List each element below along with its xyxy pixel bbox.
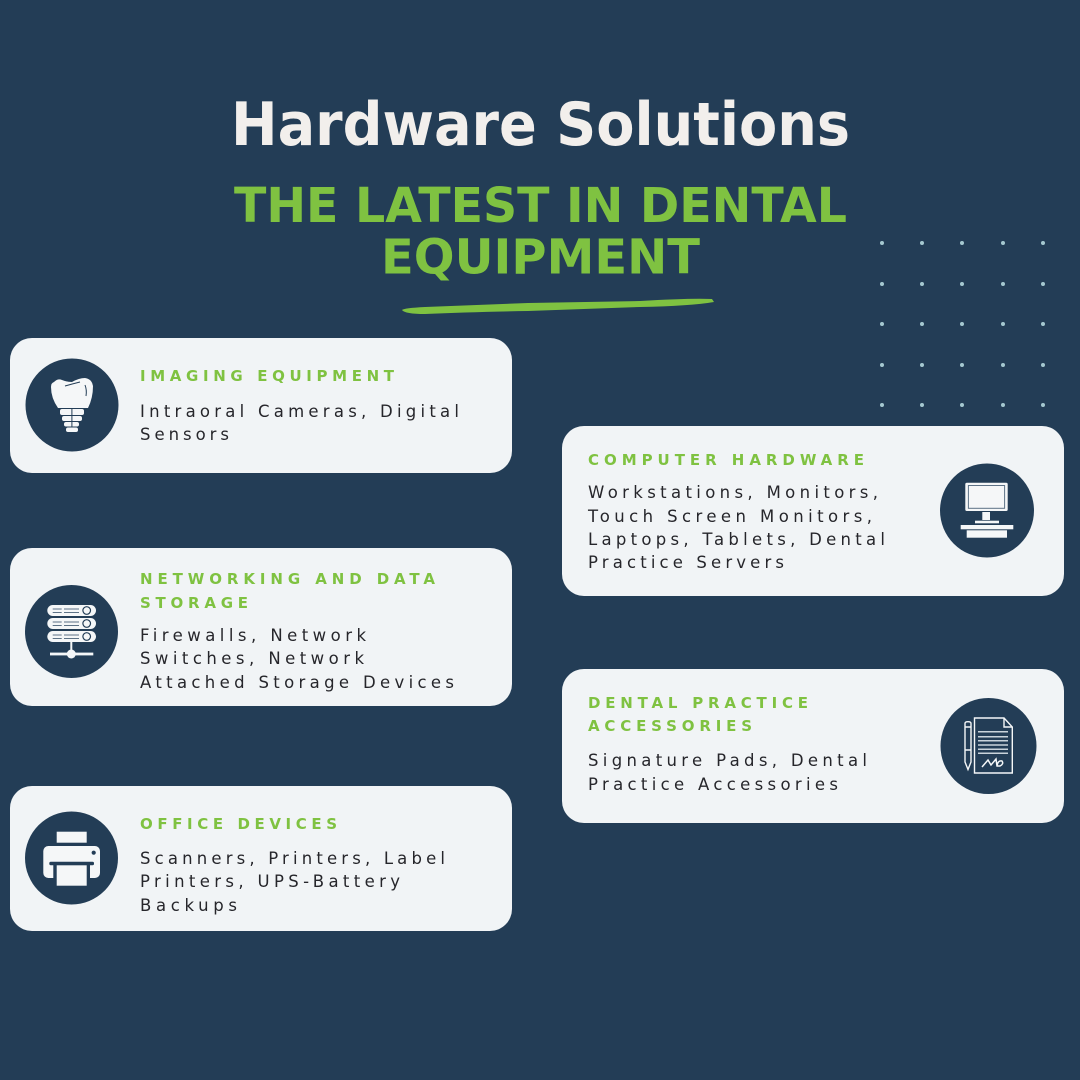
heading: IMAGING EQUIPMENT bbox=[140, 367, 395, 385]
heading: COMPUTER HARDWARE bbox=[588, 451, 864, 469]
subtitle: EQUIPMENT bbox=[381, 230, 700, 286]
body text: Sensors bbox=[140, 425, 229, 444]
heading: STORAGE bbox=[140, 594, 248, 612]
body text: Attached Storage Devices bbox=[140, 673, 454, 692]
body text: Touch Screen Monitors, bbox=[587, 507, 872, 526]
body text bbox=[140, 626, 454, 692]
heading bbox=[588, 694, 808, 735]
body text bbox=[140, 849, 445, 915]
body text bbox=[588, 751, 867, 794]
body text: Firewalls, Network bbox=[140, 626, 366, 645]
panel: dental practice accessories bbox=[562, 669, 1064, 823]
body text: Laptops, Tablets, Dental bbox=[588, 530, 885, 549]
body text: Scanners, Printers, Label bbox=[140, 849, 445, 868]
heading: DENTAL PRACTICE bbox=[588, 694, 808, 712]
panel: computer hardware bbox=[562, 426, 1064, 596]
panel: office devices bbox=[10, 786, 512, 931]
subtitle: THE LATEST IN DENTAL bbox=[234, 178, 847, 234]
subtitle bbox=[234, 178, 847, 286]
body text: Practice Accessories bbox=[588, 775, 838, 794]
body text bbox=[140, 402, 459, 444]
dot grid decoration bbox=[880, 241, 1045, 407]
heading: ACCESSORIES bbox=[588, 717, 752, 735]
heading: OFFICE DEVICES bbox=[140, 815, 337, 833]
icon: printer bbox=[25, 812, 118, 904]
panel: imaging equipment bbox=[10, 338, 512, 473]
body text bbox=[587, 483, 885, 572]
icon: server rack bbox=[25, 585, 118, 678]
heading: NETWORKING AND DATA bbox=[140, 570, 435, 588]
body text: Printers, UPS-Battery bbox=[140, 872, 400, 891]
heading bbox=[140, 570, 435, 612]
body text: Practice Servers bbox=[588, 553, 784, 572]
title: Hardware Solutions bbox=[231, 90, 850, 160]
body text: Intraoral Cameras, Digital bbox=[140, 402, 459, 421]
icon: desktop computer bbox=[940, 464, 1034, 558]
icon: dental implant bbox=[26, 358, 118, 452]
panel: networking and data storage bbox=[10, 548, 512, 706]
icon: signed document and pen bbox=[940, 698, 1036, 794]
body text: Switches, Network bbox=[140, 649, 364, 668]
body text: Backups bbox=[140, 896, 237, 915]
body text: Workstations, Monitors, bbox=[588, 483, 878, 502]
body text: Signature Pads, Dental bbox=[588, 751, 867, 770]
green brush underline bbox=[402, 299, 714, 314]
